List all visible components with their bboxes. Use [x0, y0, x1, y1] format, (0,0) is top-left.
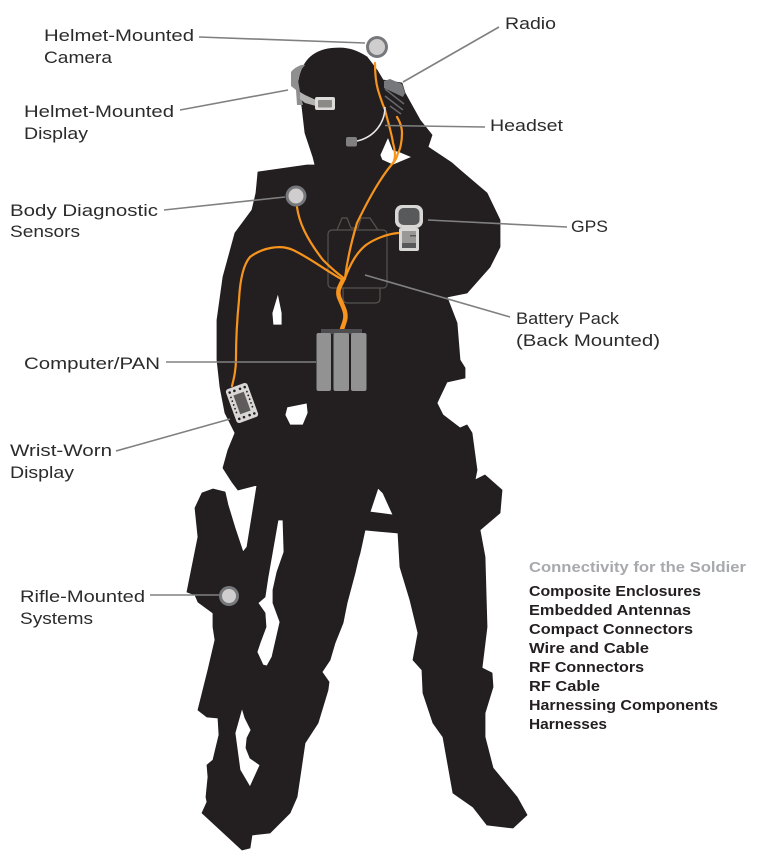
callout: rifle-mounted systems: Rifle-Mounted: [20, 587, 145, 606]
soldier silhouette: [187, 48, 527, 850]
text block: connectivity for the soldier list: Composite Enclosures: [529, 584, 701, 600]
computer/PAN battery units: [316, 329, 366, 391]
icon: GPS unit: [395, 205, 423, 251]
orange cables: [232, 63, 402, 386]
icon: headset microphone boom: [346, 107, 385, 146]
callout: body diagnostic sensors: [10, 197, 285, 241]
text block: connectivity for the soldier list: [529, 560, 746, 733]
callout: helmet-mounted camera: [44, 26, 365, 67]
callout: helmet-mounted camera: Helmet-Mounted: [44, 26, 194, 45]
callout: computer/PAN: Computer/PAN: [24, 354, 160, 373]
text block: connectivity for the soldier list: Connectivity for the Soldier: [529, 560, 746, 576]
callout: radio: Radio: [505, 14, 556, 33]
callout: battery pack: (Back Mounted): [516, 331, 660, 350]
callout: helmet-mounted display: Display: [24, 124, 89, 143]
icon: helmet-mounted display: [291, 65, 335, 110]
callout: wrist-worn display: Wrist-Worn: [10, 441, 112, 460]
callout: GPS: [428, 217, 608, 236]
callout: rifle-mounted systems: Systems: [20, 609, 93, 628]
callout: body diagnostic sensors: Body Diagnostic: [10, 201, 159, 220]
text block: connectivity for the soldier list: Harnesses: [529, 717, 607, 733]
callout: helmet-mounted display: [24, 90, 288, 143]
icon: body diagnostic sensor: [286, 186, 306, 206]
icon: radio: [384, 79, 405, 114]
text block: connectivity for the soldier list: RF Connectors: [529, 660, 644, 676]
text block: connectivity for the soldier list: Harnessing Components: [529, 698, 718, 714]
callout: battery pack: Battery Pack: [516, 309, 620, 328]
icon: rifle-mounted sensor: [219, 586, 239, 606]
icon: helmet-mounted camera: [366, 36, 388, 58]
callout: GPS: GPS: [571, 217, 608, 236]
text block: connectivity for the soldier list: Wire and Cable: [529, 641, 649, 657]
callout: headset: Headset: [490, 116, 563, 135]
callout: battery pack: [365, 275, 660, 350]
icon: wrist-worn display: [225, 382, 259, 424]
text block: connectivity for the soldier list: RF Cable: [529, 679, 600, 695]
text block: connectivity for the soldier list: Embedded Antennas: [529, 603, 691, 619]
battery pack outline: [328, 218, 387, 303]
callout: wrist-worn display: [10, 419, 230, 482]
callout: body diagnostic sensors: Sensors: [10, 222, 80, 241]
callout: helmet-mounted display: Helmet-Mounted: [24, 102, 174, 121]
text block: connectivity for the soldier list: Compact Connectors: [529, 622, 693, 638]
callout: wrist-worn display: Display: [10, 463, 75, 482]
callout: radio: [403, 14, 556, 82]
callout: rifle-mounted systems: [20, 587, 219, 628]
callout: helmet-mounted camera: Camera: [44, 48, 113, 67]
